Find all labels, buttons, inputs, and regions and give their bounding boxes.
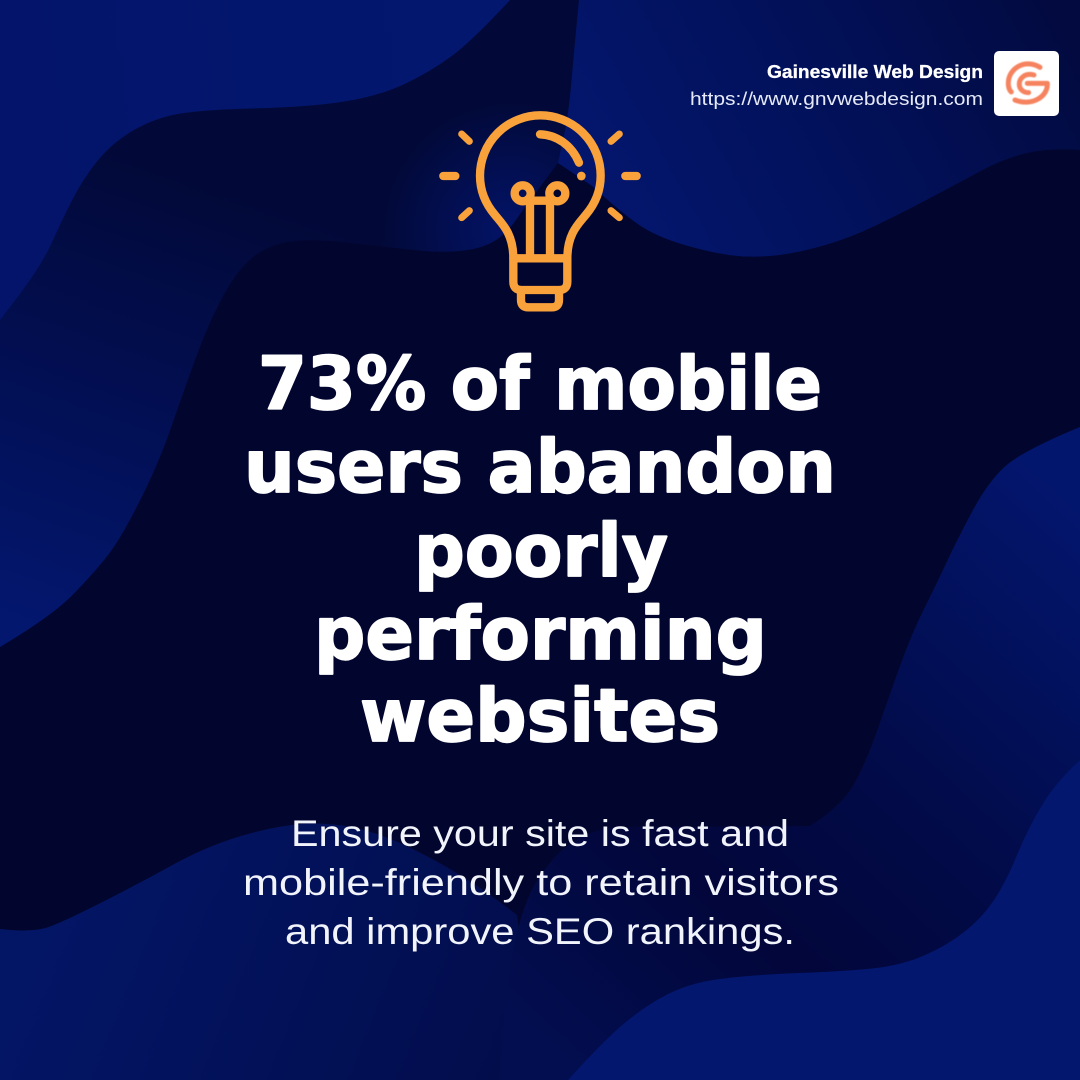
icon: light bulb: [443, 115, 637, 307]
brand header: [690, 51, 1059, 116]
brand url: https://www.gnvwebdesign.com: [690, 88, 983, 109]
title: users abandon: [244, 425, 836, 510]
title: websites: [360, 674, 720, 759]
logo badge: [994, 51, 1059, 116]
supporting text: [243, 812, 839, 952]
title: 73% of mobile: [258, 342, 822, 427]
supporting text: and improve SEO rankings.: [285, 910, 795, 952]
brand name: Gainesville Web Design: [767, 62, 983, 82]
title: [244, 342, 836, 759]
supporting text: Ensure your site is fast and: [291, 812, 789, 854]
title: poorly: [414, 509, 668, 594]
supporting text: mobile-friendly to retain visitors: [243, 861, 839, 903]
title: performing: [314, 592, 767, 677]
